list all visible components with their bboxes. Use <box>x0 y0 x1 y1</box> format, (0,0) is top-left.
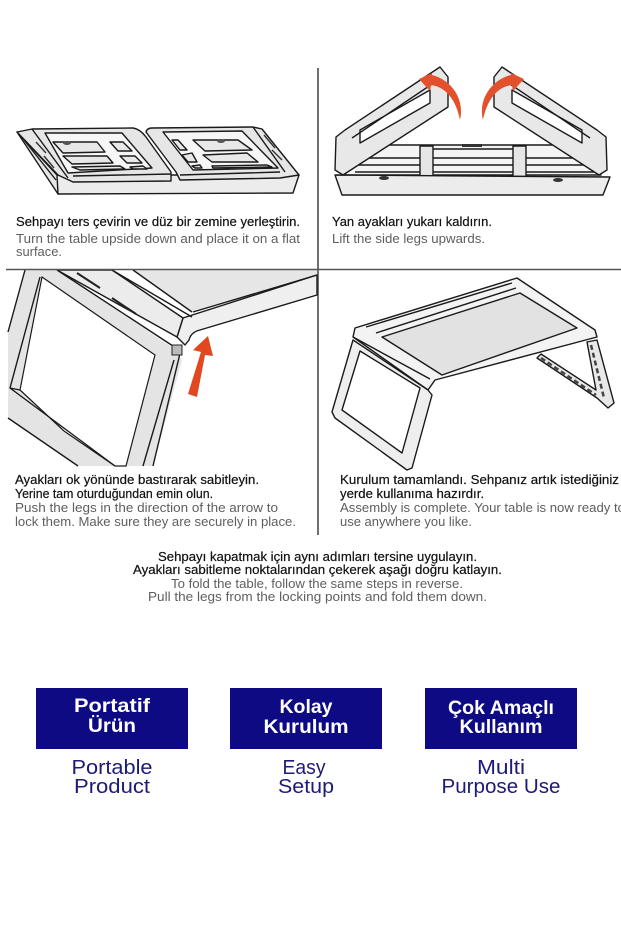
illustration: assembled table <box>332 278 614 470</box>
step 1 English text: surface. <box>16 245 62 259</box>
arrow: right curved <box>482 73 524 120</box>
step 1 English text: Turn the table upside down and place it on a flat <box>16 232 301 246</box>
folding note: Ayakları sabitleme noktalarından çekerek aşağı doğru katlayın. <box>133 563 502 577</box>
step 3 English text: Push the legs in the direction of the arrow to <box>15 501 278 515</box>
feature: portable product: Ürün <box>88 716 136 737</box>
feature: multi purpose use: Multi <box>477 757 525 779</box>
feature: easy setup <box>230 688 382 798</box>
step 4 Turkish text: Kurulum tamamlandı. Sehpanız artık istediğiniz <box>340 473 619 487</box>
step 4 English text: use anywhere you like. <box>340 515 472 529</box>
step 3 English text: lock them. Make sure they are securely in place. <box>15 515 296 529</box>
feature: multi purpose use: Kullanım <box>460 717 542 738</box>
panel: step 4 <box>332 278 621 529</box>
feature: easy setup: Kolay <box>280 697 333 718</box>
folding note: Sehpayı kapatmak için aynı adımları tersine uygulayın. <box>158 550 477 564</box>
panel: step 2 <box>332 67 610 246</box>
feature: portable product: Portatif <box>74 696 151 717</box>
step 1 English text <box>16 232 301 259</box>
left leg <box>332 340 432 470</box>
step 3 Turkish text: Yerine tam oturduğundan emin olun. <box>15 487 213 501</box>
step 4 English text <box>340 501 621 529</box>
folding note: To fold the table, follow the same steps in reverse. <box>171 577 463 591</box>
feature: easy setup: Easy <box>282 757 326 779</box>
folding note <box>133 550 502 604</box>
step 4 English text: Assembly is complete. Your table is now ready to <box>340 501 621 515</box>
feature: portable product <box>36 688 188 798</box>
step 3 Turkish text <box>15 473 259 501</box>
feature: multi purpose use: Purpose Use <box>442 776 560 798</box>
right leg raised <box>494 67 607 175</box>
feature: portable product: Portable <box>72 757 152 779</box>
step 2 Turkish text: Yan ayakları yukarı kaldırın. <box>332 215 492 229</box>
feature: easy setup: Setup <box>278 776 334 798</box>
right leg <box>537 340 614 408</box>
step 4 Turkish text: yerde kullanıma hazırdır. <box>340 487 484 501</box>
illustration: lifting side legs <box>335 67 610 195</box>
step 3 English text <box>15 501 296 529</box>
feature: multi purpose use <box>425 688 577 798</box>
illustration: locking the leg <box>8 270 317 466</box>
feature: portable product: Product <box>74 776 150 798</box>
step 1 Turkish text: Sehpayı ters çevirin ve düz bir zemine yerleştirin. <box>16 215 300 229</box>
arrow: push direction <box>188 336 213 397</box>
step 3 Turkish text: Ayakları ok yönünde bastırarak sabitleyin. <box>15 473 259 487</box>
folding note: Pull the legs from the locking points and fold them down. <box>148 590 487 604</box>
illustration: table upside down <box>17 127 299 194</box>
step 2 English text: Lift the side legs upwards. <box>332 232 485 246</box>
arrow: left curved <box>419 73 461 120</box>
step 4 Turkish text <box>340 473 619 501</box>
feature: multi purpose use: Çok Amaçlı <box>448 698 554 719</box>
left leg raised <box>335 67 448 175</box>
panel: step 3 <box>8 270 317 529</box>
feature: easy setup: Kurulum <box>264 717 348 738</box>
panel: step 1 <box>16 127 301 259</box>
tabletop <box>353 278 597 390</box>
